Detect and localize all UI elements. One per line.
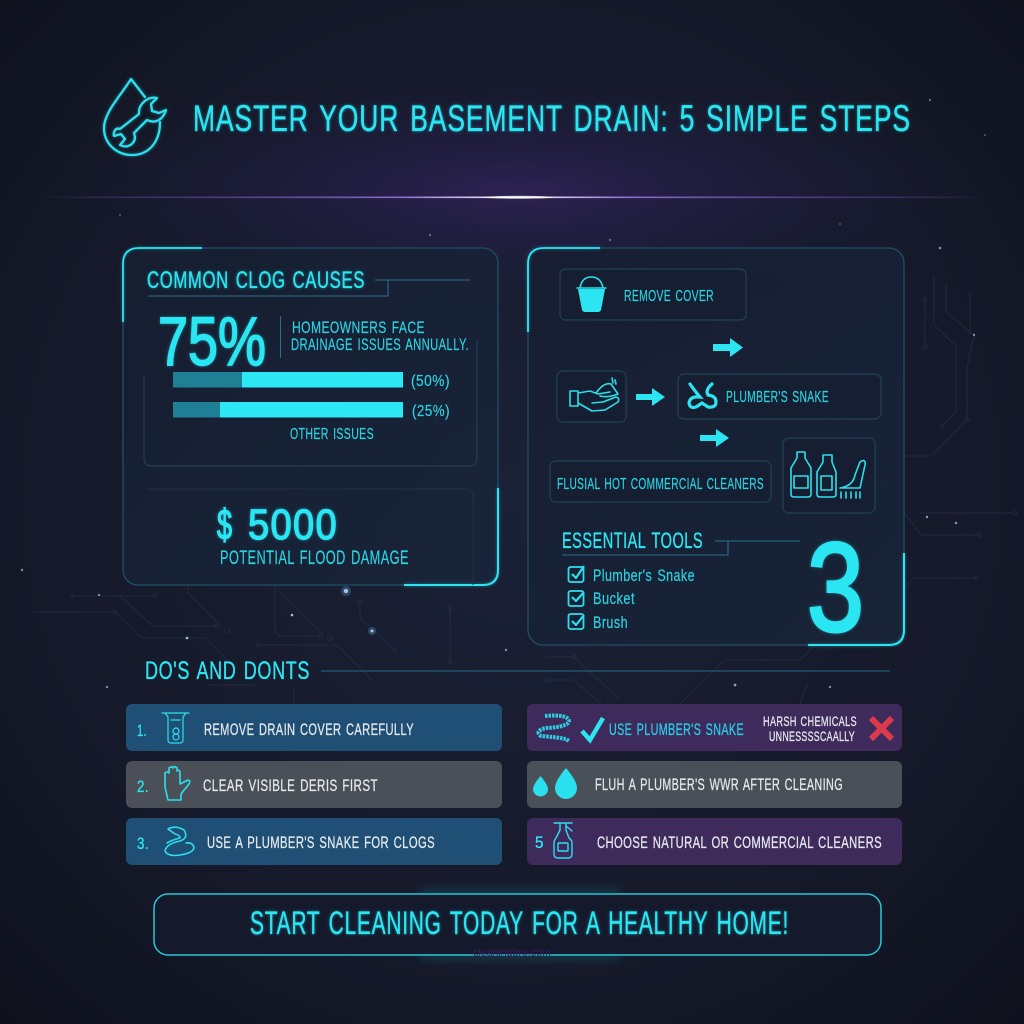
icon: bottles and brush [783, 438, 875, 513]
row: step 2: 2. [137, 777, 149, 796]
bar chart: causes: OTHER ISSUES [290, 426, 374, 443]
divider glow line [40, 196, 990, 199]
heading: common clog causes: COMMON CLOG CAUSES [147, 267, 365, 294]
arrow [713, 338, 743, 357]
step: clear debris hand [557, 371, 626, 422]
bar chart: causes: (50%) [411, 373, 450, 390]
row: step 1: REMOVE DRAIN COVER CAREFULLY [204, 720, 414, 739]
step: plumber's snake: PLUMBER'S SNAKE [726, 389, 829, 406]
stat: 5000 dollars: $ [217, 501, 233, 549]
row: step 3 [126, 818, 502, 865]
heading: do's and donts: DO'S AND DONTS [145, 657, 310, 685]
step: cleaners: FLUSIAL HOT COMMERCIAL CLEANERS [557, 476, 764, 493]
panel: common clog causes [123, 248, 498, 585]
stat: number 3: 3 [807, 517, 864, 658]
step: remove cover: REMOVE COVER [624, 288, 714, 305]
row: step 2 [126, 761, 502, 808]
row: step 5 [527, 818, 902, 865]
call to action [154, 892, 881, 957]
step: cleaners [550, 461, 771, 502]
row: flush [527, 761, 902, 808]
panel: stats inner box [144, 340, 477, 466]
icon: water drop with wrench [104, 79, 166, 155]
row: step 3: 3. [137, 834, 149, 853]
arrow [700, 429, 729, 447]
row: snake do and chemicals don't: HARSH CHEMICALS [763, 714, 857, 729]
row: step 5: 5 [535, 833, 544, 852]
checklist: tools [568, 566, 695, 632]
bar chart: causes: (25%) [412, 403, 450, 420]
panel: steps and tools [528, 248, 904, 658]
icon: check [582, 718, 603, 740]
row: step 1: 1. [137, 721, 147, 740]
stat description: HOMEOWNERS FACE [292, 318, 425, 337]
panel: flood damage inner box [146, 489, 473, 585]
icon: red cross [871, 718, 892, 739]
stat: 75 percent: 75% [158, 303, 266, 380]
row: flush: FLUH A PLUMBER'S WWR AFTER CLEANING [595, 775, 843, 794]
row: step 5: CHOOSE NATURAL OR COMMERCIAL CLEANERS [597, 833, 882, 852]
bar chart: causes [173, 372, 450, 443]
watermark: cleaningbro.com [473, 947, 551, 959]
checklist: tools: Bucket [593, 590, 635, 608]
row: snake do and chemicals don't [527, 704, 902, 751]
row: step 1 [126, 704, 502, 751]
step: remove cover [560, 269, 746, 320]
checklist: tools: Brush [593, 614, 628, 632]
text: potential flood damage: POTENTIAL FLOOD DAMAGE [220, 548, 409, 569]
row: snake do and chemicals don't: USE PLUMBER'S SNAKE [609, 720, 744, 739]
row: snake do and chemicals don't: UNNESSSSCAALLY [769, 729, 855, 744]
arrow [636, 388, 665, 406]
stat: 5000 dollars: 5000 [248, 501, 338, 549]
row: step 3: USE A PLUMBER'S SNAKE FOR CLOGS [207, 833, 435, 852]
stat description: DRAINAGE ISSUES ANNUALLY. [291, 335, 469, 354]
step: plumber's snake [678, 374, 881, 419]
heading: essential tools: ESSENTIAL TOOLS [562, 528, 703, 553]
checklist: tools: Plumber's Snake [593, 567, 695, 585]
row: step 2: CLEAR VISIBLE DERIS FIRST [203, 776, 378, 795]
